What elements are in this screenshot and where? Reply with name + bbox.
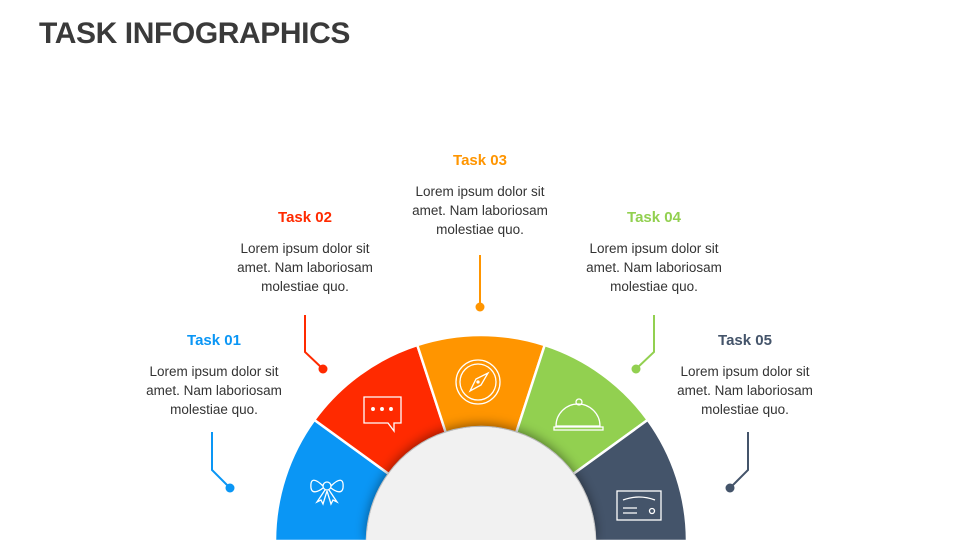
text: task 03: Lorem ipsum dolor sit amet. Nam laboriosam molestiae quo. [412,184,548,237]
text: task 02 [237,209,373,294]
icon: cloche [554,399,603,430]
text: task 04: Lorem ipsum dolor sit amet. Nam laboriosam molestiae quo. [586,241,722,294]
connector: task 05 [726,432,748,492]
icon: compass [456,360,500,404]
text: task 02: Task 02 [278,209,332,226]
connector: task 04 [632,315,654,374]
text: task 03: Task 03 [453,152,507,169]
text: task 03 [412,152,548,237]
text: task 05: Lorem ipsum dolor sit amet. Nam laboriosam molestiae quo. [677,364,813,417]
icon: chat [364,397,401,431]
connector: task 01 [212,432,234,492]
text: task 04: Task 04 [627,209,681,226]
text: task 02: Lorem ipsum dolor sit amet. Nam laboriosam molestiae quo. [237,241,373,294]
text: task 05: Task 05 [718,332,772,349]
segments [275,335,687,540]
title: TASK INFOGRAPHICS [39,17,350,50]
connector: task 03 [476,255,484,312]
icon: certificate [617,491,661,520]
inner circle [367,427,595,540]
icon: bow [311,480,343,504]
connector: task 02 [305,315,328,374]
text: task 04 [586,209,722,294]
text: task 01 [146,332,282,417]
text: task 01: Task 01 [187,332,241,349]
text: task 01: Lorem ipsum dolor sit amet. Nam laboriosam molestiae quo. [146,364,282,417]
text: task 05 [677,332,813,417]
